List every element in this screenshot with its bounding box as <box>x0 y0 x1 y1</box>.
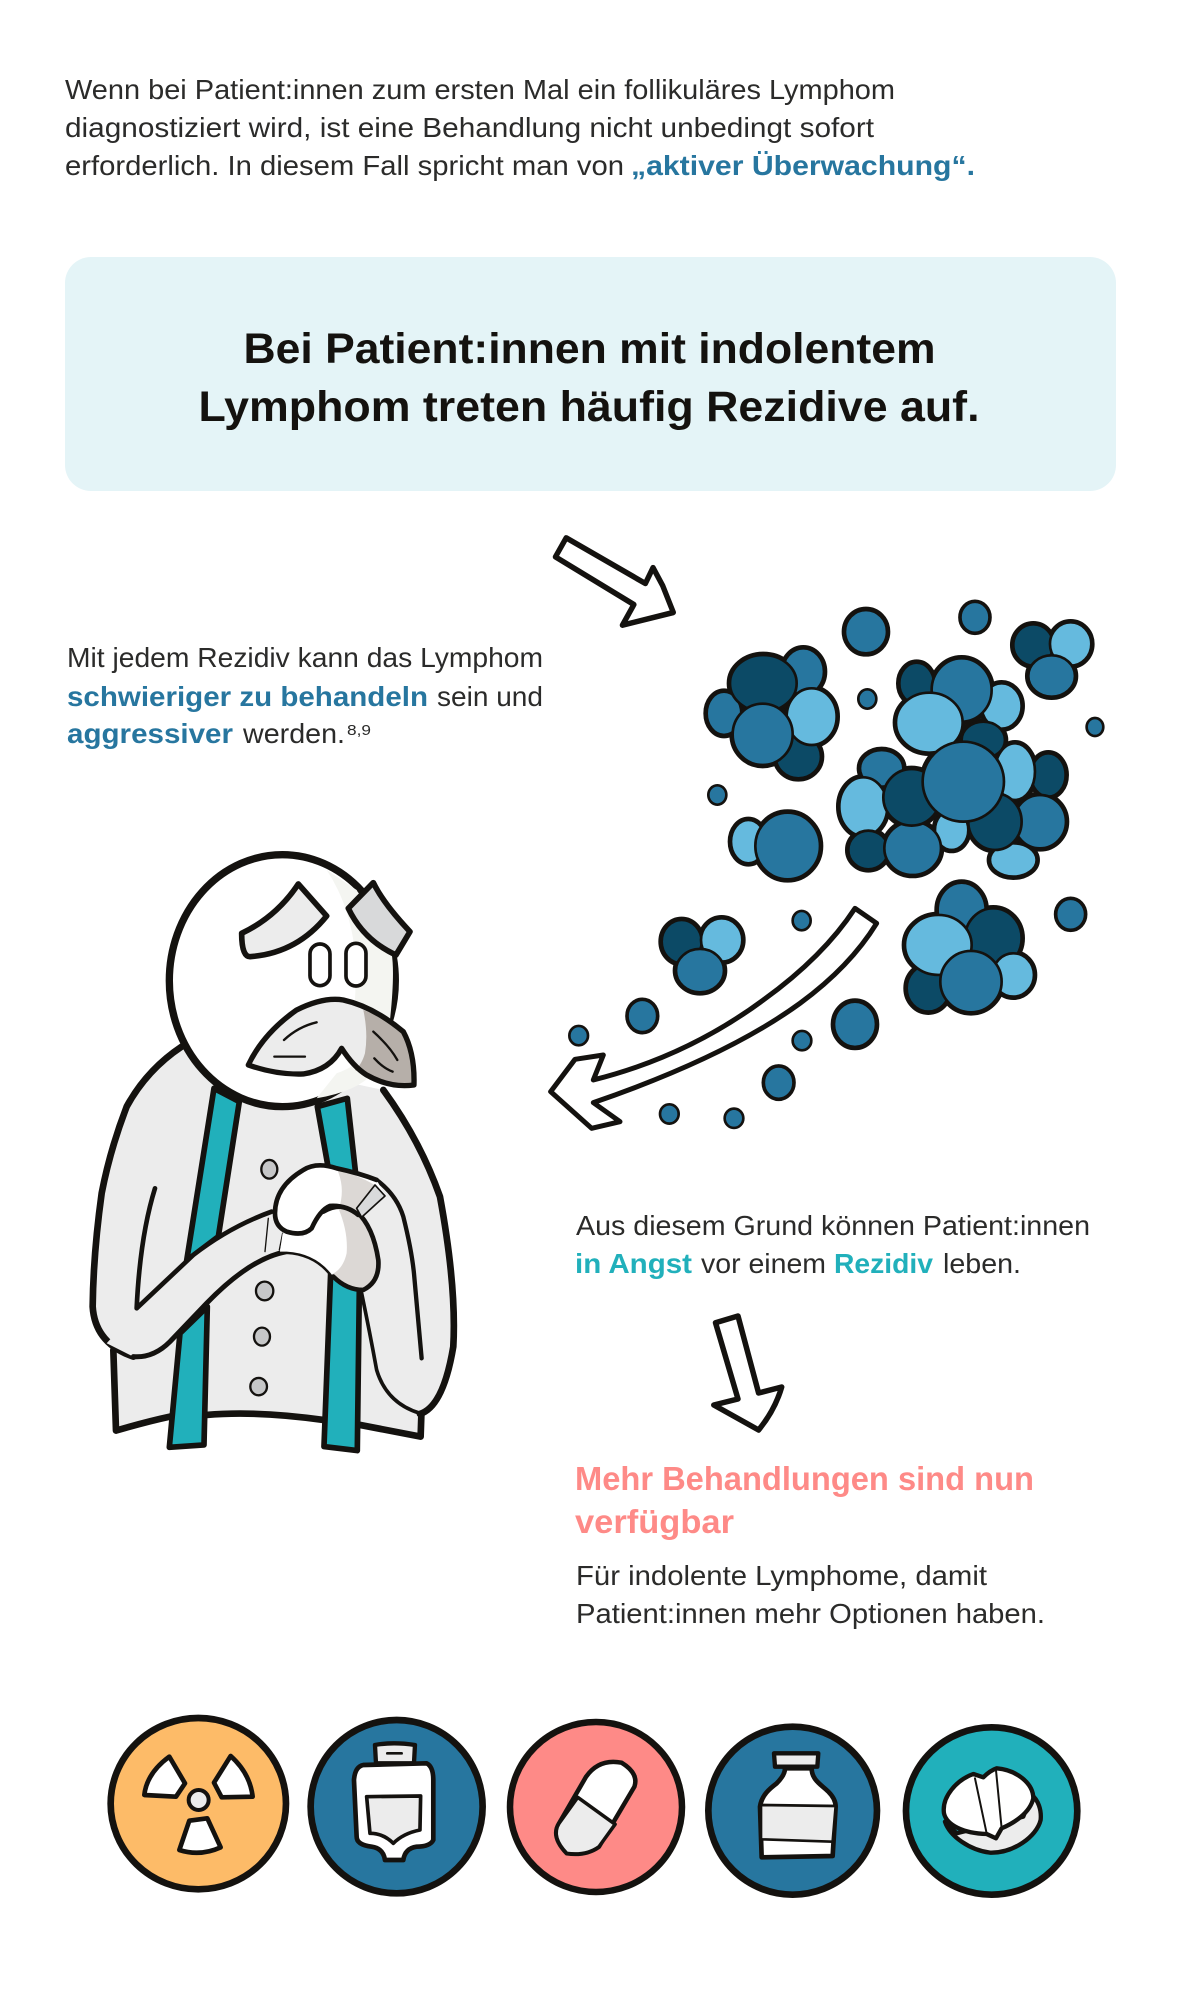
heading <box>198 325 980 431</box>
cluster: left pair <box>731 813 820 879</box>
text: more options <box>576 1560 1045 1629</box>
heading: more treatments: Mehr Behandlungen sind nun <box>575 1460 1034 1497</box>
text: recurrence: aggressiver <box>67 718 233 749</box>
cluster: lower left trio <box>662 918 742 992</box>
cluster: large centre <box>839 658 1066 877</box>
intro text <box>65 74 975 181</box>
cluster: lower right <box>905 883 1034 1012</box>
coat lower <box>113 1307 422 1437</box>
icon: infusion bag <box>311 1720 483 1893</box>
text: recurrence: sein und <box>437 681 543 712</box>
icon: radiation <box>111 1718 286 1889</box>
text: fear of recurrence: in Angst <box>575 1248 692 1279</box>
text: fear of recurrence: vor einem <box>701 1248 826 1279</box>
text: fear of recurrence: Aus diesem Grund können Patient:innen <box>576 1210 1090 1241</box>
intro text: Wenn bei Patient:innen zum ersten Mal ein follikuläres Lymphom <box>65 74 895 105</box>
arrow: curved to patient <box>551 908 877 1128</box>
moustache <box>248 999 414 1086</box>
arrow: down <box>714 1316 782 1430</box>
eyebrows <box>242 883 410 957</box>
suspenders <box>169 1088 359 1451</box>
illustration: lymphoma cells <box>569 601 1103 1128</box>
buttons <box>250 1160 277 1395</box>
head <box>169 855 395 1107</box>
text: fear of recurrence: leben. <box>943 1248 1021 1279</box>
text: fear of recurrence <box>575 1210 1090 1279</box>
eyes <box>310 943 366 986</box>
text: recurrence: Mit jedem Rezidiv kann das Lymphom <box>67 642 543 673</box>
heading: Bei Patient:innen mit indolentem <box>244 325 936 373</box>
head shading <box>317 870 393 1098</box>
icon row: treatments <box>111 1718 1077 1895</box>
heading: more treatments: verfügbar <box>575 1503 734 1540</box>
text: fear of recurrence: Rezidiv <box>834 1248 933 1279</box>
heading: Lymphom treten häufig Rezidive auf. <box>198 383 980 431</box>
cluster: upper left <box>707 648 837 778</box>
icon: capsule <box>510 1722 682 1892</box>
hand lower <box>280 1207 378 1290</box>
coat upper <box>93 1047 454 1414</box>
arrow: to cells <box>555 538 673 625</box>
text: recurrence: schwieriger zu behandeln <box>67 681 428 712</box>
arm right <box>362 1180 422 1413</box>
text: recurrence: werden. <box>242 718 345 749</box>
panel: key message <box>65 257 1116 491</box>
single cells <box>569 601 1103 1128</box>
icon: bottle <box>708 1727 877 1895</box>
intro text: „aktiver Überwachung“. <box>631 150 975 181</box>
text: more options: Für indolente Lymphome, damit <box>576 1560 987 1591</box>
text: recurrence: 8,9 <box>347 722 371 739</box>
intro text: erforderlich. In diesem Fall spricht man von <box>65 150 624 181</box>
cluster: upper right small <box>1013 622 1091 697</box>
illustration: worried patient <box>93 855 454 1451</box>
hand upper <box>275 1165 385 1234</box>
text: more options: Patient:innen mehr Optionen haben. <box>576 1598 1045 1629</box>
intro text: diagnostiziert wird, ist eine Behandlung nicht unbedingt sofort <box>65 112 874 143</box>
icon: tablet <box>906 1727 1077 1895</box>
text: recurrence <box>67 642 543 749</box>
arm left <box>107 1188 333 1357</box>
heading: more treatments <box>575 1460 1034 1540</box>
